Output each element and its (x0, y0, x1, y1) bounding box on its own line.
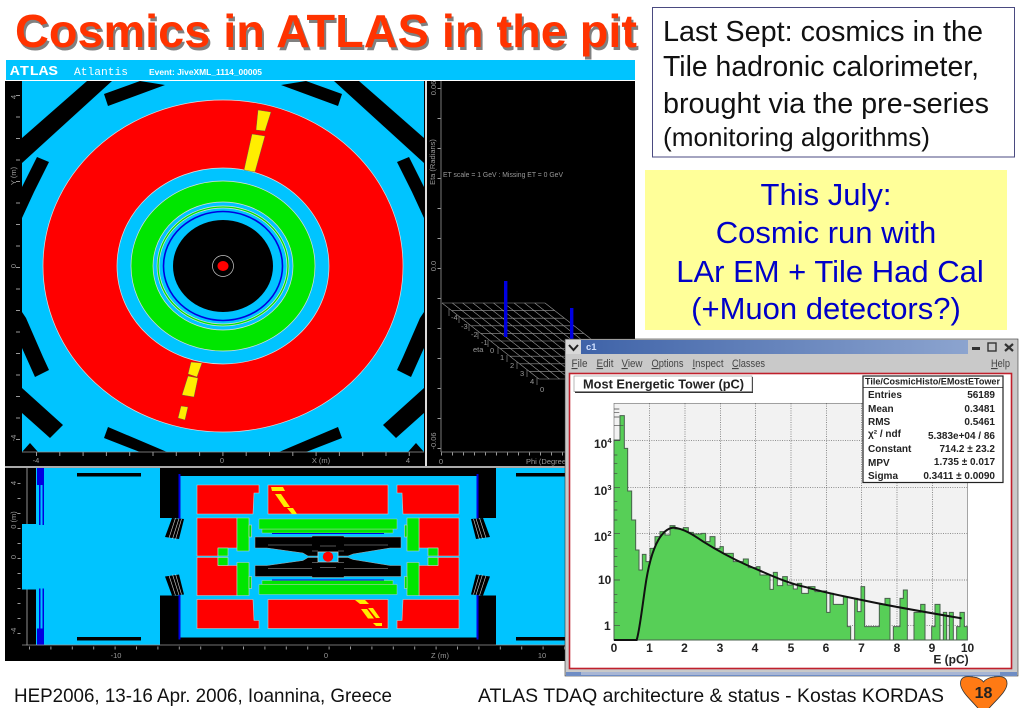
axis labels: 0 (324, 651, 328, 660)
axis labels: 0 (9, 555, 18, 559)
panel: Atlantis header bar (6, 60, 635, 80)
panel: X-Y detector view (5, 81, 425, 467)
axis labels: -4 (9, 628, 18, 634)
statistics box: 0.3411 ± 0.0090 (923, 471, 995, 482)
x axis labels: 3 (717, 641, 724, 655)
y axis labels: 3 (607, 483, 612, 492)
axes and labels: 1 (500, 353, 504, 362)
panel: R-Z detector view (5, 466, 570, 661)
statistics box: Constant (868, 444, 912, 455)
text block: last September: brought via the pre-series (663, 88, 989, 120)
cosmic hits, upper (271, 487, 297, 514)
x axis labels: 5 (788, 641, 795, 655)
axis ticks and labels: 0 (220, 456, 224, 465)
title: Cosmics in ATLAS in the pit (15, 5, 637, 57)
axis labels: 4 (9, 481, 18, 485)
interaction point (318, 552, 338, 562)
statistics box: 714.2 ± 23.2 (939, 444, 995, 455)
statistics box: 5.383e+04 / 86 (928, 431, 995, 442)
callout: this July: LAr EM + Tile Had Cal (676, 254, 984, 289)
statistics box: Entries (868, 390, 902, 401)
histogram heading: Most Energetic Tower (pC) (583, 376, 744, 392)
y axis labels: 2 (607, 529, 612, 538)
axes and labels: Eta (Radians) (428, 139, 437, 185)
text block: last September (652, 8, 1014, 157)
canvas frame (570, 374, 1012, 668)
x axis labels (611, 641, 974, 666)
axis ticks and labels: 4 (9, 95, 18, 99)
window menu bar: View (622, 358, 643, 370)
histogram chart (594, 403, 974, 666)
axis ticks and labels: -4 (9, 435, 18, 441)
axes and labels: 4 (530, 377, 534, 386)
x axis labels: 7 (858, 641, 865, 655)
window title bar (566, 340, 1017, 354)
axes and labels: 0 (490, 346, 494, 355)
axes and labels (428, 81, 635, 466)
y axis labels: 1 (604, 619, 611, 633)
axes and labels: 2 (510, 361, 514, 370)
statistics box (863, 376, 1003, 482)
y axis labels: 10 (594, 530, 607, 544)
y axis labels: 10 (594, 484, 607, 498)
axis ticks and labels (9, 95, 424, 465)
axes and labels: -0.06 (429, 432, 438, 450)
window menu bar: Edit (596, 358, 614, 370)
window menu bar: Inspect (692, 358, 724, 370)
cosmic hits in yellow (178, 110, 271, 420)
x axis labels: 9 (929, 641, 936, 655)
callout: this July: This July: (761, 177, 891, 212)
statistics box: Mean (868, 404, 894, 415)
axes and labels: Phi (Degrees) (526, 457, 573, 466)
footer: conference: HEP2006, 13-16 Apr. 2006, Ioannina, Greece (14, 685, 392, 707)
title: Cosmics in ATLAS in the pit (17, 8, 639, 60)
axis labels: -10 (111, 651, 121, 660)
text block: last September: Tile hadronic calorimeter, (663, 51, 979, 83)
text block: last September: (monitoring algorithms) (663, 122, 930, 152)
statistics box: 0.3481 (964, 404, 995, 415)
x axis labels: 6 (823, 641, 830, 655)
axis labels (9, 481, 568, 660)
statistics box: Sigma (868, 471, 898, 482)
upper half of detector (22, 468, 568, 556)
axes and labels: 0 (540, 385, 544, 394)
axes and labels: -4 (451, 313, 458, 322)
axis labels: Z (m) (431, 651, 449, 660)
axis ticks and labels: 4 (406, 456, 410, 465)
x axis labels: 0 (611, 641, 618, 655)
axis ticks and labels: Y (m) (9, 166, 18, 185)
axes and labels: ET scale = 1 GeV : Missing ET = 0 GeV (443, 170, 563, 179)
callout: this July (645, 170, 1007, 330)
axes and labels: 0.06 (429, 81, 438, 95)
concentric calorimeter rings (43, 100, 403, 432)
axis ticks and labels: X (m) (312, 456, 331, 465)
y axis labels: 4 (607, 436, 612, 445)
statistics box: χ² / ndf (868, 429, 902, 440)
axes and labels: -2 (471, 330, 478, 339)
panel: Atlantis header bar: Atlantis (74, 67, 128, 79)
axis ticks and labels: -4 (33, 456, 39, 465)
window menu bar: File (572, 358, 588, 370)
lower half of detector, mirrored (22, 558, 568, 646)
axis labels: 0 (m) (9, 511, 18, 529)
axes and labels: eta (473, 345, 484, 354)
footer: talk title: ATLAS TDAQ architecture & status - Kostas KORDAS (478, 685, 944, 707)
statistics box: RMS (868, 417, 891, 428)
window menu bar: Options (652, 358, 684, 370)
window menu bar (572, 358, 1010, 370)
text block: last September: Last Sept: cosmics in the (663, 16, 983, 48)
axes and labels: 3 (520, 369, 524, 378)
panel: Atlantis header bar: Event: JiveXML_1114_00005 (149, 67, 262, 77)
statistics box: Tile/CosmicHisto/EMostETower (865, 376, 1000, 386)
axes and labels: 0 (439, 457, 443, 466)
window menu bar: Classes (732, 358, 765, 370)
black muon chambers (22, 81, 424, 452)
window menu bar: Help (991, 358, 1010, 370)
y axis labels (594, 436, 612, 633)
callout: this July: (+Muon detectors?) (691, 291, 961, 326)
page number heart (960, 677, 1007, 708)
panel: lego plot (425, 81, 635, 467)
axes and labels: -3 (461, 322, 468, 331)
y axis labels: 10 (598, 573, 612, 587)
x axis labels: 1 (646, 641, 653, 655)
statistics box: 0.5461 (964, 417, 995, 428)
y axis labels: 10 (594, 437, 607, 451)
cosmic hits, lower (355, 600, 382, 626)
window title bar: c1 (586, 342, 597, 353)
panel: Atlantis header bar: ATLAS (10, 64, 58, 80)
panel: histogram window (565, 339, 1018, 676)
axes and labels: -1 (481, 338, 488, 347)
callout: this July: Cosmic run with (716, 215, 936, 250)
axis ticks and labels: 0 (9, 264, 18, 268)
lego grid (442, 303, 635, 385)
x axis labels: 4 (752, 641, 759, 655)
blue energy towers (504, 281, 507, 337)
x axis labels: 2 (681, 641, 688, 655)
statistics box: 56189 (967, 390, 995, 401)
axis labels: 10 (538, 651, 546, 660)
x axis labels: E (pC) (933, 652, 969, 666)
axes and labels: 0.0 (429, 261, 438, 271)
statistics box: 1.735 ± 0.017 (934, 457, 995, 468)
statistics box: MPV (868, 458, 890, 469)
x axis labels: 10 (961, 641, 974, 655)
page number heart: 18 (975, 685, 992, 702)
window bottom border (566, 672, 1017, 676)
x axis labels: 8 (894, 641, 901, 655)
